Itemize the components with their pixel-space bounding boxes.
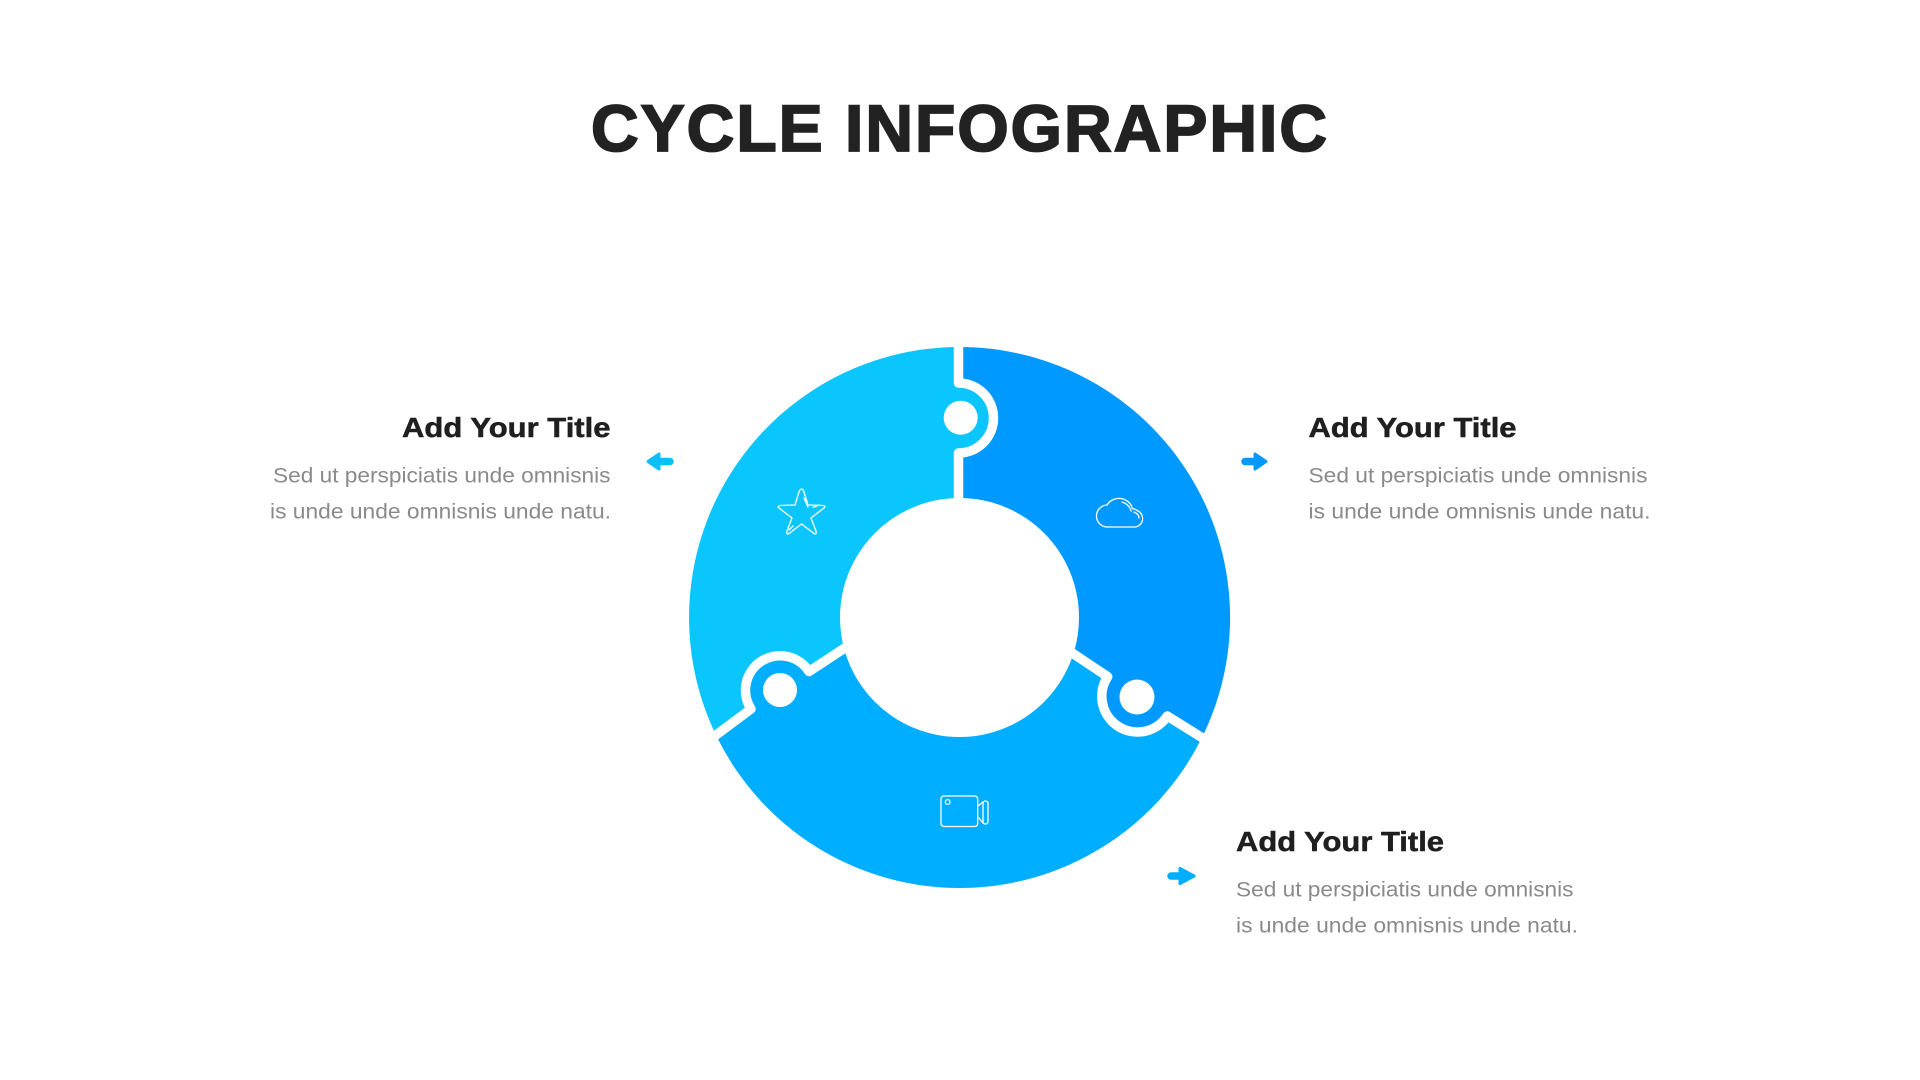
arrow: right — [1245, 454, 1266, 469]
text block: right — [1308, 412, 1650, 524]
body: right — [1308, 464, 1650, 524]
joint hole: top — [944, 401, 978, 435]
divider: top puzzle joint — [958, 340, 994, 505]
divider: lower right puzzle joint — [1048, 637, 1217, 747]
segment: bottom mid blue — [717, 618, 1202, 888]
body: bottom: Sed ut perspiciatis unde omnisnis — [1236, 878, 1574, 902]
body: left: Sed ut perspiciatis unde omnisnis — [273, 464, 610, 488]
icon: star — [778, 489, 825, 534]
body: bottom: is unde unde omnisnis unde natu. — [1236, 914, 1578, 938]
segment: right dark blue — [958, 347, 1230, 738]
icon: cloud — [1096, 498, 1143, 527]
body: right: Sed ut perspiciatis unde omnisnis — [1308, 464, 1648, 488]
body: right: is unde unde omnisnis unde natu. — [1308, 500, 1650, 524]
text block: bottom — [1236, 826, 1578, 938]
center hole — [840, 498, 1079, 737]
joint hole: lower right — [1120, 680, 1154, 714]
body: left — [270, 464, 611, 524]
heading: right: Add Your Title — [1308, 412, 1516, 443]
text block: left — [270, 412, 611, 524]
divider: lower left puzzle joint — [700, 638, 860, 747]
joint hole: lower left — [763, 673, 797, 707]
segment: left light blue — [689, 347, 994, 737]
arrow: bottom — [1171, 868, 1194, 884]
cycle ring chart — [689, 340, 1230, 888]
arrow: left — [648, 454, 670, 469]
heading: bottom: Add Your Title — [1236, 826, 1444, 857]
icon: video camera — [941, 796, 988, 826]
body: bottom — [1236, 878, 1578, 938]
heading: left: Add Your Title — [402, 412, 610, 443]
body: left: is unde unde omnisnis unde natu. — [270, 500, 611, 524]
title: CYCLE INFOGRAPHIC — [591, 91, 1327, 165]
